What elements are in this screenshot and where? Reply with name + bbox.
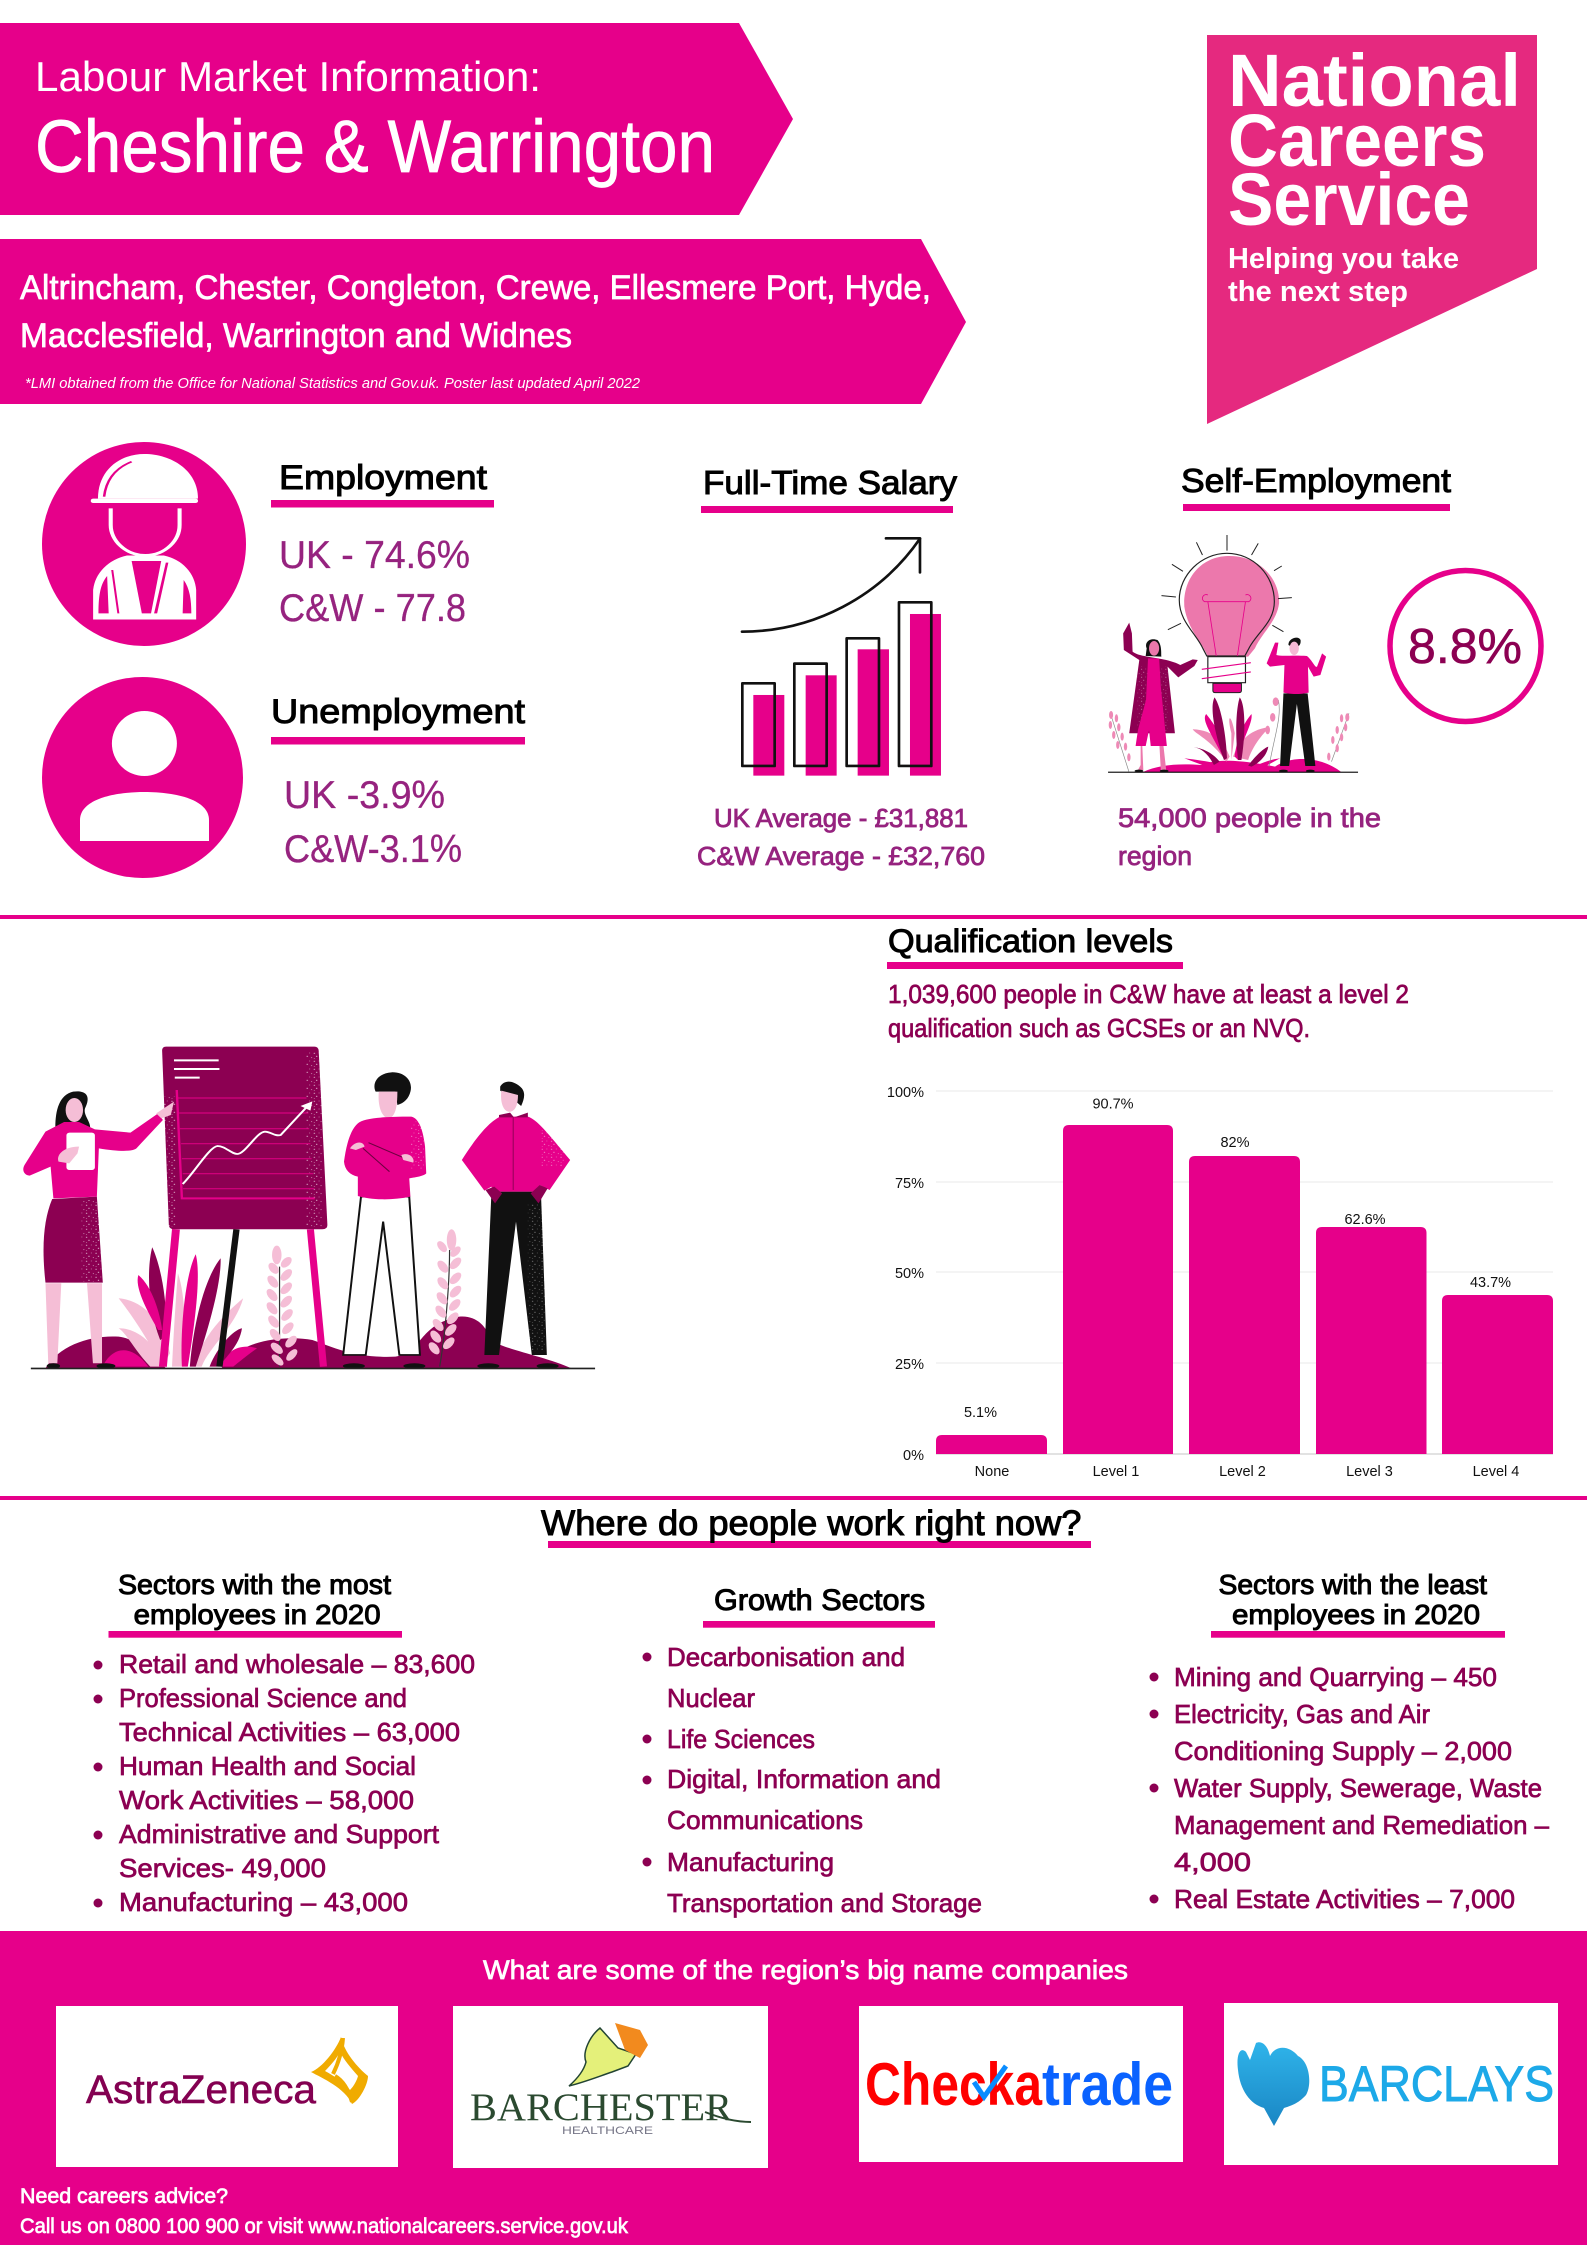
banner: towns and source note: Altrincham, Chester, Congleton, Crewe, Ellesmere Port, Hyde, (20, 269, 931, 307)
logo: Checkatrade: Checka (865, 2051, 1043, 2118)
banner: towns and source note: Macclesfield, Warrington and Widnes (20, 317, 572, 355)
logo: National Careers Service: Helping you take (1228, 243, 1459, 275)
panel: sectors with the most employees: Technical Activities – 63,000 (119, 1717, 460, 1747)
panel: sectors with the most employees: Services- 49,000 (119, 1853, 326, 1883)
heading: Employment (271, 459, 494, 508)
text: unemployment figures: C&W-3.1% (284, 828, 462, 871)
y axis labels: 25% (895, 1357, 924, 1373)
panel: sectors with the most employees: Manufacturing – 43,000 (119, 1887, 408, 1917)
logo: AstraZeneca: AstraZeneca (86, 2068, 317, 2112)
banner: towns and source note: *LMI obtained from the Office for National Statistics and Gov.uk. Poster last updated April 2022 (25, 375, 641, 392)
text: self-employed count: 54,000 people in the (1118, 803, 1381, 833)
y axis labels: 0% (903, 1448, 924, 1464)
panel: sectors with the most employees: Human Health and Social (119, 1751, 416, 1781)
panel: growth sectors: Digital, Information and (667, 1764, 941, 1794)
category labels: None (975, 1464, 1009, 1480)
y axis labels: 75% (895, 1176, 924, 1192)
icon: person (42, 677, 243, 878)
heading: Employment: Employment (279, 459, 488, 497)
text: careers advice contact: Need careers advice? (20, 2185, 228, 2208)
text: qualification summary: 1,039,600 people in C&W have at least a level 2 (888, 979, 1409, 1009)
logo: Barchester Healthcare (453, 2006, 768, 2168)
y axis labels (887, 1085, 924, 1464)
illustration: lightbulb with two people (1108, 535, 1358, 773)
logo: Barclays (1224, 2003, 1558, 2165)
man with hands on hips (462, 1082, 570, 1369)
y axis labels: 100% (887, 1085, 924, 1101)
illustration: three people with chart board (23, 1047, 595, 1369)
banner: towns and source note (0, 239, 966, 404)
man by the bulb (1267, 638, 1326, 772)
bars (936, 1125, 1553, 1454)
category labels: Level 4 (1473, 1464, 1519, 1480)
category labels: Level 1 (1093, 1464, 1139, 1480)
panel: sectors with the least employees: Management and Remediation – (1174, 1810, 1550, 1840)
text: careers advice contact (20, 2185, 628, 2238)
callout: 8.8% self-employment (1390, 570, 1541, 722)
logo: National Careers Service: the next step (1228, 276, 1408, 308)
banner: title: Cheshire & Warrington (35, 105, 715, 188)
panel: sectors with the least employees: employees in 2020 (1232, 1599, 1480, 1630)
value labels: 62.6% (1344, 1212, 1386, 1228)
logo: National Careers Service: Careers (1228, 99, 1486, 182)
heading: Full-Time Salary: Full-Time Salary (703, 464, 958, 501)
man with folded arms (343, 1072, 426, 1369)
panel: growth sectors: Manufacturing (667, 1847, 834, 1877)
panel: sectors with the most employees: Sectors with the most (118, 1569, 391, 1600)
woman presenting (23, 1091, 174, 1369)
panel: sectors with the least employees: Electricity, Gas and Air (1174, 1699, 1430, 1729)
icon: rising bar chart with arrow (742, 538, 941, 776)
heading: big name companies: What are some of the region’s big name companies (483, 1955, 1128, 1985)
logo: AstraZeneca (56, 2006, 398, 2167)
logo: National Careers Service (1207, 35, 1537, 424)
panel: sectors with the most employees: Work Activities – 58,000 (119, 1785, 414, 1815)
panel: growth sectors (642, 1584, 982, 1918)
text: self-employed count: region (1118, 841, 1192, 871)
heading: Self-Employment: Self-Employment (1181, 462, 1451, 499)
panel: sectors with the most employees: Retail and wholesale – 83,600 (119, 1649, 475, 1679)
text: employment figures: C&W - 77.8 (279, 587, 466, 630)
logo: National Careers Service: National (1228, 39, 1521, 122)
panel: growth sectors: Life Sciences (667, 1724, 815, 1754)
value labels (964, 1097, 1511, 1421)
logo: National Careers Service: Service (1228, 158, 1470, 241)
logo: Barchester Healthcare: BARCHESTER (470, 2086, 732, 2129)
panel: growth sectors: Growth Sectors (714, 1584, 925, 1617)
chart board (162, 1047, 327, 1229)
banner: title: Labour Market Information: (35, 53, 541, 100)
heading: Where do people work right now: Where do people work right now? (541, 1504, 1082, 1543)
panel: sectors with the least employees: Mining and Quarrying – 450 (1174, 1662, 1497, 1692)
category labels: Level 3 (1346, 1464, 1393, 1480)
callout: 8.8% self-employment: 8.8% (1408, 620, 1522, 674)
bar chart: qualification levels (887, 1085, 1553, 1480)
heading: Unemployment: Unemployment (271, 693, 526, 731)
panel: big name companies footer (0, 1931, 1587, 2245)
panel: sectors with the least employees: Sectors with the least (1218, 1569, 1487, 1600)
panel: sectors with the least employees: Water Supply, Sewerage, Waste (1174, 1773, 1542, 1803)
text: qualification summary (888, 979, 1409, 1043)
text: employment figures: UK - 74.6% (279, 534, 470, 577)
banner: title (0, 23, 793, 215)
value labels: 90.7% (1092, 1097, 1134, 1113)
text: salary averages (697, 803, 985, 871)
value labels: 43.7% (1470, 1275, 1511, 1291)
panel: sectors with the least employees: Real Estate Activities – 7,000 (1174, 1884, 1515, 1914)
panel: growth sectors: Communications (667, 1805, 863, 1835)
text: employment figures (279, 534, 470, 630)
y axis labels: 50% (895, 1266, 924, 1282)
panel: sectors with the most employees: Professional Science and (119, 1683, 407, 1713)
woman by the bulb (1123, 623, 1198, 772)
panel: sectors with the most employees: Administrative and Support (119, 1819, 440, 1849)
logo: Checkatrade (859, 2006, 1183, 2162)
logo: Checkatrade: trade (1042, 2051, 1173, 2118)
logo: Barclays: BARCLAYS (1319, 2056, 1554, 2112)
heading: Qualification levels: Qualification levels (888, 923, 1173, 959)
icon: construction worker (42, 442, 246, 646)
panel: sectors with the least employees: Conditioning Supply – 2,000 (1174, 1736, 1512, 1766)
panel: sectors with the least employees (1150, 1569, 1550, 1914)
text: salary averages: UK Average - £31,881 (714, 803, 968, 833)
panel: growth sectors: Nuclear (667, 1683, 755, 1713)
text: qualification summary: qualification such as GCSEs or an NVQ. (888, 1013, 1310, 1043)
panel: sectors with the least employees: 4,000 (1174, 1847, 1251, 1877)
logo: Barchester Healthcare: HEALTHCARE (562, 2125, 653, 2137)
panel: growth sectors: Decarbonisation and (667, 1642, 905, 1672)
category labels: Level 2 (1219, 1464, 1266, 1480)
text: careers advice contact: Call us on 0800 100 900 or visit www.nationalcareers.service.gov.uk (20, 2215, 628, 2238)
panel: sectors with the most employees (94, 1569, 475, 1917)
panel: sectors with the most employees: employees in 2020 (134, 1599, 381, 1630)
heading: Unemployment (271, 693, 526, 744)
value labels: 82% (1220, 1135, 1250, 1151)
text: unemployment figures (284, 774, 462, 871)
text: salary averages: C&W Average - £32,760 (697, 841, 985, 871)
category labels (975, 1464, 1519, 1480)
panel: growth sectors: Transportation and Storage (667, 1888, 982, 1918)
text: unemployment figures: UK -3.9% (284, 774, 445, 817)
value labels: 5.1% (964, 1405, 997, 1421)
text: self-employed count (1118, 803, 1381, 871)
